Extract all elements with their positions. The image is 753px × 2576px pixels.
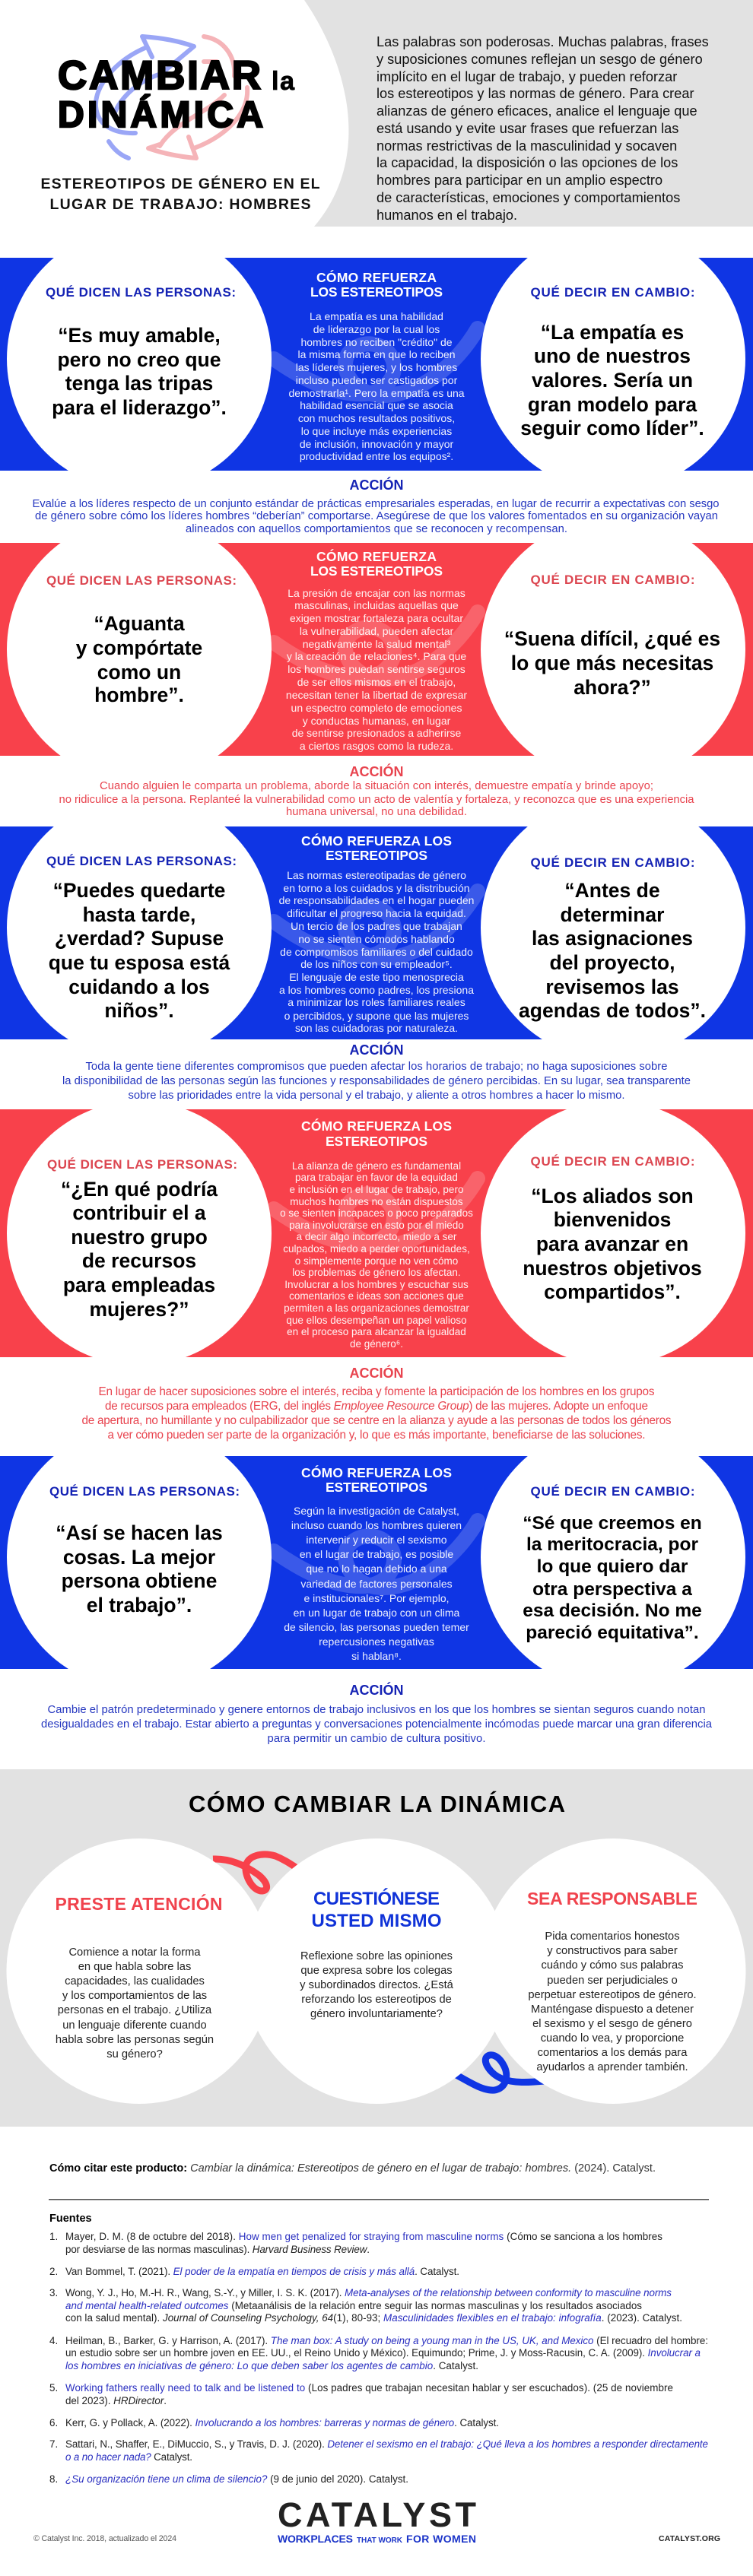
- text: explanation: de los niños con su empleador⁵.: [300, 958, 453, 970]
- source 4: 4.: [49, 2335, 58, 2346]
- text: explanation: Involucrar a los hombres y escuchar sus: [284, 1279, 469, 1290]
- quote: what people say: [56, 1521, 223, 1616]
- quote: what people say: “Puedes quedarte: [53, 879, 225, 902]
- heading: how it reinforces: ESTEREOTIPOS: [326, 1480, 427, 1495]
- action: alineados con aquellos comportamientos que se reconocen y recompensan.: [186, 523, 567, 535]
- heading: question yourself: [312, 1888, 441, 1931]
- quote: what to say instead: esa decisión. No me: [523, 1600, 702, 1621]
- source 3: and mental health-related outcomes (Metaanálisis de la relación entre seguir las normas masculinas y los resultados asociados: [65, 2300, 642, 2311]
- heading: be accountable: SEA RESPONSABLE: [527, 1889, 697, 1908]
- logo: Catalyst: FOR WOMEN: [406, 2533, 476, 2545]
- quote: what to say instead: “Sé que creemos en: [523, 1513, 702, 1534]
- text: explanation: lo que incluye más experiencias: [301, 425, 452, 437]
- header grey background: [304, 0, 753, 227]
- quote: what people say: pero no creo que: [58, 348, 221, 371]
- blue band with circles: [0, 258, 753, 471]
- heading: pay attention: PRESTE ATENCIÓN: [55, 1893, 222, 1914]
- text: explanation: para trabajar en favor de la equidad: [295, 1172, 458, 1183]
- quote: what people say: cuidando a los: [68, 976, 210, 998]
- icon: watermark ribbon: [274, 891, 478, 958]
- source 5: Working fathers really need to talk and be listened to (Los padres que trabajan necesitan hablar y ser escuchados). (25 de noviembre: [65, 2382, 673, 2394]
- text: pay attention: y los comportamientos de las: [62, 1990, 207, 2002]
- quote: what to say instead: determinar: [561, 903, 664, 926]
- text: explanation: necesitan tener la libertad de expresar: [286, 689, 467, 701]
- text: explanation: a minimizar los roles familiares reales: [288, 996, 465, 1008]
- text: explanation: hombres no reciben "crédito" de: [300, 336, 453, 348]
- heading: how it reinforces: [301, 1118, 452, 1149]
- sources heading: Fuentes: [49, 2213, 92, 2225]
- quote: what people say: hombre”.: [94, 684, 184, 706]
- circle: pay attention: [6, 1838, 272, 2104]
- quote: what people say: “Aguanta: [94, 612, 185, 635]
- action: [32, 477, 720, 535]
- heading: question yourself: CUESTIÓNESE: [313, 1888, 440, 1909]
- text: explanation: en torno a los cuidados y la distribución: [283, 882, 470, 894]
- source 3: [49, 2287, 682, 2324]
- text: explanation: demostrarla¹. Pero la empatía es una: [288, 387, 465, 399]
- quote: what to say instead: “Suena difícil, ¿qué es: [504, 627, 720, 650]
- heading: how it reinforces: CÓMO REFUERZA: [316, 269, 437, 285]
- text: pay attention: su género?: [106, 2048, 163, 2060]
- text: be accountable: [528, 1930, 697, 2073]
- panel: stereotype 2: [0, 517, 753, 818]
- heading: how it reinforces: ESTEREOTIPOS: [326, 1134, 427, 1149]
- text: explanation: culpados, miedo a perder oportunidades,: [283, 1243, 470, 1255]
- text: explanation: que ellos desempeñan un papel valioso: [286, 1315, 467, 1326]
- text: explanation: de sentirse presionados a adherirse: [292, 727, 462, 739]
- quote: what to say instead: las asignaciones: [532, 927, 693, 950]
- source 6: Kerr, G. y Pollack, A. (2022). Involucrando a los hombres: barreras y normas de género. Catalyst.: [65, 2417, 499, 2428]
- source 8: 8.: [49, 2473, 58, 2485]
- text: be accountable: Manténgase dispuesto a detener: [531, 2003, 694, 2016]
- source 7: 7.: [49, 2438, 58, 2450]
- quote: what people say: [76, 612, 202, 706]
- intro text: implícito en el lugar de trabajo, y pueden reforzar: [376, 69, 677, 84]
- quote: what people say: [61, 1178, 218, 1321]
- heading: how it reinforces: CÓMO REFUERZA LOS: [301, 1118, 452, 1134]
- red band with circles: [0, 543, 753, 756]
- action: ACCIÓN: [350, 477, 403, 493]
- text: explanation: de silencio, las personas pueden temer: [284, 1621, 469, 1633]
- icon: red squiggle: [213, 1854, 298, 1891]
- quote: what people say: cosas. La mejor: [63, 1546, 215, 1569]
- quote: what to say instead: gran modelo para: [528, 393, 697, 416]
- quote: what to say instead: [520, 321, 704, 439]
- source 4: Heilman, B., Barker, G. y Harrison, A. (2017). The man box: A study on being a young man in the US, UK, and Mexico (El recuadro del hombre:: [65, 2335, 708, 2346]
- panel: stereotype 5: [0, 1425, 753, 1745]
- text: be accountable: comentarios a los demás para: [538, 2047, 688, 2059]
- intro text: humanos en el trabajo.: [376, 208, 517, 223]
- text: pay attention: Comience a notar la forma: [68, 1946, 201, 1959]
- footer: [33, 2495, 720, 2545]
- quote: what to say instead: agendas de todos”.: [519, 999, 706, 1022]
- text: explanation: o simplemente porque no ven cómo: [295, 1255, 458, 1267]
- intro text: normas restrictivas de la masculinidad y socaven: [376, 138, 677, 154]
- heading: how it reinforces: [310, 548, 443, 579]
- action: de recursos para empleados (ERG, del inglés Employee Resource Group) de las mujeres. Adopte un enfoque: [105, 1400, 648, 1413]
- intro text: los estereotipos y las normas de género. Para crear: [376, 86, 694, 101]
- text: explanation: a ciertos rasgos como la rudeza.: [300, 740, 453, 752]
- action: sobre las prioridades entre la vida personal y el trabajo, y aliente a otros hombres a hacer lo mismo.: [128, 1090, 625, 1102]
- text: explanation: Las normas estereotipadas de género: [287, 869, 466, 881]
- label: what people say: QUÉ DICEN LAS PERSONAS:: [49, 1484, 240, 1499]
- text: explanation: e institucionales⁷. Por ejemplo,: [303, 1592, 450, 1604]
- quote: what to say instead: lo que quiero dar: [537, 1556, 688, 1577]
- text: explanation: a los hombres como padres, los presiona: [279, 984, 474, 996]
- source 4: los hombres en iniciativas de género: Lo que deben saber los agentes de cambio. Catalyst.: [65, 2360, 478, 2371]
- heading: how it reinforces: CÓMO REFUERZA: [316, 548, 437, 564]
- quote: what to say instead: “La empatía es: [541, 321, 684, 344]
- heading: how it reinforces: [301, 833, 452, 863]
- text: explanation: La alianza de género es fundamental: [292, 1160, 461, 1172]
- source 4: un estudio sobre ser un hombre joven en EE. UU., el Reino Unido y México). Equimundo; Prime, J. y Moss-Racusin, C. A. (2009). Involucrar a: [65, 2347, 701, 2359]
- text: explanation: con muchos resultados positivos,: [298, 412, 455, 424]
- text: be accountable: pueden ser perjudiciales o: [547, 1975, 678, 1987]
- red band with circles: [0, 1101, 753, 1366]
- text: explanation: de compromisos familiares o del cuidado: [280, 946, 473, 958]
- text: explanation: muchos hombres no están dispuestos: [290, 1196, 463, 1207]
- quote: what people say: de recursos: [82, 1249, 196, 1272]
- text: explanation: de liderazgo por la cual los: [313, 323, 440, 335]
- text: pay attention: [56, 1946, 214, 2060]
- label: what to say instead: QUÉ DECIR EN CAMBIO:: [531, 855, 695, 870]
- text: explanation: incluso cuando los hombres quieren: [291, 1519, 462, 1531]
- quote: what people say: para el liderazgo”.: [52, 396, 227, 419]
- heading: how it reinforces: [301, 1464, 452, 1495]
- action: de género sobre cómo los líderes hombres “deberían” comportarse. Asegúrese de que los valores fomentados en su organización vayan: [35, 510, 718, 522]
- text: question yourself: y subordinados directos. ¿Está: [300, 1979, 454, 1991]
- text: question yourself: Reflexione sobre las opiniones: [300, 1950, 453, 1962]
- label: what people say: QUÉ DICEN LAS PERSONAS:: [47, 1157, 237, 1172]
- intro text: de características, emociones y comportamientos: [376, 190, 680, 205]
- source 2: Van Bommel, T. (2021). El poder de la empatía en tiempos de crisis y más allá. Catalyst.: [65, 2266, 459, 2277]
- text: explanation: la vulnerabilidad, pueden afectar: [300, 625, 454, 637]
- quote: what people say: [52, 324, 227, 419]
- source 1: Mayer, D. M. (8 de octubre del 2018). How men get penalized for straying from masculine norms (Cómo se sanciona a los hombres: [65, 2231, 662, 2242]
- action: no ridiculice a la persona. Replanteé la vulnerabilidad como un acto de valentía y fortaleza, y reconozca que es una experiencia: [59, 794, 694, 806]
- action: Evalúe a los líderes respecto de un conjunto estándar de prácticas empresariales esperadas, en lugar de recurrir a expectativas con sesgo: [32, 498, 720, 510]
- label: what people say: QUÉ DICEN LAS PERSONAS:: [46, 285, 236, 300]
- quote: what people say: “Es muy amable,: [58, 324, 221, 347]
- title: CAMBIAR: [58, 53, 261, 98]
- panel: stereotype 4: [0, 1101, 753, 1442]
- action: ACCIÓN: [350, 1365, 403, 1381]
- intro text: [376, 34, 709, 223]
- text: explanation: exigen mostrar fortaleza para ocultar: [290, 612, 463, 624]
- quote: what people say: [49, 879, 230, 1022]
- source 7: Sattari, N., Shaffer, E., DiMuccio, S., y Travis, D. J. (2020). Detener el sexismo en el trabajo: ¿Qué lleva a los hombres a responder directamente: [65, 2438, 708, 2450]
- source 5: [49, 2382, 673, 2406]
- text: explanation: [279, 869, 474, 1034]
- title: [58, 53, 295, 135]
- text: explanation: a decir algo incorrecto, miedo a ser: [297, 1231, 457, 1242]
- heading: CÓMO CAMBIAR LA DINÁMICA: [189, 1790, 565, 1817]
- quote: what to say instead: [504, 627, 720, 699]
- quote: what to say instead: nuestros objetivos: [523, 1257, 702, 1280]
- action: de apertura, no humillante y no culpabilizador que se centre en la alianza y ayude a las personas de todos los géneros: [82, 1414, 672, 1427]
- heading: how it reinforces: LOS ESTEREOTIPOS: [310, 284, 443, 300]
- text: explanation: los problemas de género los afectan.: [292, 1267, 461, 1278]
- text: explanation: son las cuidadoras por naturaleza.: [295, 1022, 458, 1034]
- label: what to say instead: QUÉ DECIR EN CAMBIO:: [531, 573, 695, 587]
- text: explanation: El lenguaje de este tipo menosprecia: [289, 971, 464, 983]
- source 5: 5.: [49, 2382, 58, 2394]
- text: explanation: intervenir y reducir el sexismo: [306, 1534, 447, 1546]
- logo: Catalyst: THAT WORK: [357, 2536, 403, 2545]
- label: what people say: QUÉ DICEN LAS PERSONAS:: [46, 854, 237, 868]
- source 2: 2.: [49, 2266, 58, 2277]
- text: explanation: un espectro completo de emociones: [291, 702, 462, 714]
- text: explanation: e inclusión en el lugar de trabajo, pero: [290, 1184, 463, 1195]
- icon: circular arrows behind title: [96, 36, 247, 158]
- text: explanation: de inclusión, innovación y mayor: [300, 438, 453, 450]
- heading: question yourself: USTED MISMO: [312, 1911, 441, 1931]
- text: explanation: la misma forma en que lo reciben: [298, 348, 455, 360]
- text: explanation: o percibidos, y supone que las mujeres: [284, 1010, 469, 1022]
- text: question yourself: reforzando los estereotipos de: [301, 1994, 452, 2006]
- source 1: [49, 2231, 662, 2255]
- source 1: por desviarse de las normas masculinas). Harvard Business Review.: [65, 2244, 370, 2255]
- source 8: ¿Su organización tiene un clima de silencio? (9 de junio del 2020). Catalyst.: [65, 2473, 408, 2485]
- text: explanation: no se sienten cómodos hablando: [298, 933, 455, 945]
- text: explanation: [286, 587, 467, 752]
- intro text: está usando y evite usar frases que refuerzan las: [376, 121, 678, 136]
- quote: what to say instead: “Antes de: [564, 879, 660, 902]
- quote: what people say: como un: [97, 661, 181, 684]
- panel: stereotype 1: [0, 258, 753, 535]
- action: la disponibilidad de las personas según las funciones y responsabilidades de género percibidas. En su lugar, sea transparente: [62, 1075, 691, 1087]
- quote: what people say: el trabajo”.: [87, 1594, 192, 1616]
- source 5: del 2023). HRDirector.: [65, 2395, 167, 2406]
- text: explanation: en un lugar de trabajo con un clima: [294, 1607, 460, 1619]
- text: be accountable: Pida comentarios honestos: [545, 1930, 680, 1943]
- text: explanation: y conductas humanas, en lugar: [303, 715, 451, 727]
- quote: what to say instead: [523, 1513, 702, 1643]
- text: explanation: productividad entre los equipos².: [300, 450, 453, 462]
- action: ACCIÓN: [350, 1042, 403, 1058]
- quote: what to say instead: ahora?”: [573, 676, 651, 699]
- heading: how it reinforces: [310, 269, 443, 300]
- quote: what people say: nuestro grupo: [71, 1226, 208, 1248]
- source 1: 1.: [49, 2231, 58, 2242]
- quote: what to say instead: la meritocracia, por: [526, 1534, 698, 1555]
- action: Cambie el patrón predeterminado y genere entornos de trabajo inclusivos en los que los hombres se sientan seguros cuando notan: [47, 1704, 706, 1716]
- text: be accountable: ayudarlos a aprender también.: [536, 2061, 688, 2073]
- icon: watermark ribbon: [274, 1521, 478, 1588]
- action: a ver cómo pueden ser parte de la organización y, lo que es más importante, beneficiarse de las soluciones.: [108, 1429, 645, 1442]
- text: explanation: comentarios e ideas son acciones que: [289, 1290, 464, 1302]
- quote: what people say: mujeres?”: [89, 1298, 189, 1321]
- quote: what people say: y compórtate: [76, 636, 202, 659]
- quote: what people say: hasta tarde,: [83, 903, 195, 926]
- quote: what to say instead: seguir como líder”.: [520, 417, 704, 439]
- icon: watermark ribbon: [274, 1179, 478, 1245]
- intro text: y suposiciones comunes reflejan un sesgo de género: [376, 52, 703, 67]
- source 7: [49, 2438, 708, 2463]
- label: what to say instead: QUÉ DECIR EN CAMBIO:: [531, 1484, 695, 1499]
- circle: question yourself: [243, 1838, 510, 2104]
- quote: what people say: niños”.: [104, 999, 174, 1022]
- action: ACCIÓN: [350, 763, 403, 779]
- intro text: hombres para participar en un amplio espectro: [376, 173, 662, 188]
- text: explanation: negativamente la salud mental³: [303, 638, 451, 650]
- text: explanation: La presión de encajar con las normas: [288, 587, 465, 599]
- action: ACCIÓN: [350, 1682, 403, 1698]
- text: explanation: si hablan⁸.: [351, 1650, 402, 1662]
- source 3: 3.: [49, 2287, 58, 2298]
- circle: be accountable: [481, 1838, 745, 2104]
- text: explanation: en el proceso para alcanzar la igualdad: [287, 1326, 466, 1337]
- quote: what to say instead: otra perspectiva a: [532, 1579, 692, 1600]
- action: [41, 1682, 713, 1745]
- action: Toda la gente tiene diferentes compromisos que pueden afectar los horarios de trabajo; no haga suposiciones sobre: [85, 1061, 668, 1073]
- section background: [0, 1769, 753, 2127]
- panel: header: [41, 0, 753, 227]
- action: Cuando alguien le comparta un problema, aborde la situación con interés, demuestre empatía y brinde apoyo;: [100, 780, 653, 792]
- heading: how it reinforces: LOS ESTEREOTIPOS: [310, 563, 443, 579]
- text: explanation: de responsabilidades en el hogar pueden: [279, 894, 474, 906]
- text: explanation: que no lo hagan debido a una: [306, 1562, 447, 1575]
- heading: how it reinforces: ESTEREOTIPOS: [326, 848, 427, 863]
- text: explanation: de género⁶.: [350, 1338, 403, 1350]
- text: pay attention: en que habla sobre las: [78, 1961, 191, 1973]
- text: explanation: variedad de factores personales: [300, 1578, 453, 1590]
- text: explanation: dificultar el progreso hacia la equidad.: [287, 907, 466, 919]
- panel: stereotype 3: [0, 826, 753, 1101]
- citation: Cómo citar este producto: Cambiar la dinámica: Estereotipos de género en el lugar de trabajo: hombres. (2024). Catalyst.: [49, 2162, 656, 2175]
- label: what to say instead: QUÉ DECIR EN CAMBIO:: [531, 285, 695, 300]
- quote: what to say instead: revisemos las: [545, 976, 679, 998]
- text: explanation: y la creación de relaciones⁴. Para que: [287, 650, 466, 662]
- text: explanation: las líderes mujeres, y los hombres: [296, 361, 457, 373]
- text: be accountable: perpetuar estereotipos de género.: [528, 1989, 697, 2001]
- text: explanation: permiten a las organizaciones demostrar: [284, 1302, 469, 1314]
- blue band with circles: [0, 826, 753, 1039]
- action: [62, 1042, 691, 1102]
- heading: how it reinforces: CÓMO REFUERZA LOS: [301, 833, 452, 849]
- title: DINÁMICA: [58, 94, 263, 135]
- action: [59, 763, 694, 818]
- quote: what people say: “Así se hacen las: [56, 1521, 223, 1544]
- quote: what to say instead: uno de nuestros: [534, 344, 691, 367]
- blue band with circles: [0, 1456, 753, 1669]
- text: question yourself: que expresa sobre los colegas: [300, 1965, 453, 1977]
- source 7: o a no hacer nada? Catalyst.: [65, 2451, 192, 2463]
- quote: what people say: para empleadas: [63, 1274, 215, 1296]
- text: question yourself: género involuntariamente?: [310, 2008, 443, 2020]
- quote: what to say instead: compartidos”.: [544, 1280, 681, 1303]
- logo: Catalyst: WORKPLACES: [278, 2533, 353, 2545]
- intro text: la capacidad, la disposición o las opciones de los: [376, 155, 678, 170]
- quote: what to say instead: para avanzar en: [536, 1232, 688, 1255]
- title: la: [272, 67, 295, 96]
- text: explanation: o se sienten incapaces o poco preparados: [280, 1207, 473, 1219]
- text: explanation: [284, 1505, 469, 1662]
- text: explanation: masculinas, incluidas aquellas que: [294, 599, 459, 611]
- quote: what to say instead: pareció equitativa”.: [526, 1623, 699, 1643]
- action: [82, 1365, 672, 1442]
- text: explanation: repercusiones negativas: [319, 1635, 434, 1648]
- text: explanation: [280, 1160, 473, 1350]
- icon: watermark ribbon: [274, 612, 478, 679]
- quote: what people say: ¿verdad? Supuse: [55, 927, 224, 950]
- label: what to say instead: QUÉ DECIR EN CAMBIO:: [531, 1154, 695, 1169]
- sources: [49, 2213, 708, 2485]
- icon: blue squiggle: [456, 2055, 545, 2090]
- text: be accountable: cuando lo vea, y proporcione: [541, 2032, 684, 2045]
- source 3: con la salud mental). Journal of Counseling Psychology, 64(1), 80-93; Masculinidades flexibles en el trabajo: infografía. (2023). Catalyst.: [65, 2312, 682, 2324]
- subtitle: ESTEREOTIPOS DE GÉNERO EN EL: [41, 175, 320, 192]
- action: En lugar de hacer suposiciones sobre el interés, reciba y fomente la participación de los hombres en los grupos: [99, 1385, 655, 1398]
- quote: what people say: tenga las tripas: [65, 372, 213, 395]
- action: desigualdades en el trabajo. Estar abierto a preguntas y conversaciones potencialmente incómodas puede marcar una gran diferencia: [41, 1718, 713, 1731]
- quote: what to say instead: del proyecto,: [550, 951, 675, 974]
- source 6: 6.: [49, 2417, 58, 2428]
- text: pay attention: habla sobre las personas según: [56, 2034, 214, 2046]
- text: explanation: habilidad esencial que se asocia: [300, 399, 453, 411]
- quote: what people say: “¿En qué podría: [61, 1178, 218, 1201]
- action: para permitir un cambio de cultura positivo.: [268, 1733, 485, 1745]
- quote: what to say instead: lo que más necesitas: [511, 652, 713, 674]
- text: explanation: La empatía es una habilidad: [310, 310, 443, 322]
- text: explanation: Un tercio de los padres que trabajan: [291, 920, 462, 932]
- text: question yourself: [300, 1950, 454, 2020]
- text: explanation: en el lugar de trabajo, es posible: [300, 1548, 453, 1560]
- text: pay attention: un lenguaje diferente cuando: [62, 2019, 207, 2032]
- text: be accountable: el sexismo y el sesgo de género: [532, 2018, 692, 2030]
- action: humana universal, no una debilidad.: [286, 806, 467, 818]
- text: explanation: incluso pueden ser castigados por: [296, 374, 458, 386]
- subtitle: LUGAR DE TRABAJO: HOMBRES: [50, 196, 310, 213]
- source 4: [49, 2335, 708, 2371]
- subtitle: [41, 175, 320, 213]
- source 3: Wong, Y. J., Ho, M.-H. R., Wang, S.-Y., y Miller, I. S. K. (2017). Meta-analyses of the relationship between conformity to masculine norms: [65, 2287, 672, 2298]
- text: be accountable: cuándo y cómo sus palabras: [542, 1959, 683, 1972]
- text: pay attention: capacidades, las cualidades: [65, 1975, 205, 1988]
- text: explanation: Según la investigación de Catalyst,: [294, 1505, 459, 1517]
- text: pay attention: personas en el trabajo. ¿Utiliza: [58, 2004, 212, 2016]
- quote: what to say instead: “Los aliados son: [531, 1185, 694, 1207]
- heading: how it reinforces: CÓMO REFUERZA LOS: [301, 1464, 452, 1480]
- website: CATALYST.ORG: [659, 2534, 720, 2543]
- intro text: alianzas de género eficaces, analice el lenguaje que: [376, 103, 697, 119]
- quote: what to say instead: valores. Sería un: [532, 369, 693, 392]
- text: explanation: para involucrarse en esto por el miedo: [289, 1220, 464, 1231]
- quote: what to say instead: [523, 1185, 702, 1303]
- quote: what to say instead: [519, 879, 706, 1022]
- quote: what people say: que tu esposa está: [49, 951, 230, 974]
- quote: what to say instead: bienvenidos: [554, 1208, 671, 1231]
- intro text: Las palabras son poderosas. Muchas palabras, frases: [376, 34, 709, 49]
- text: explanation: los hombres puedan sentirse seguros: [288, 663, 465, 675]
- label: what people say: QUÉ DICEN LAS PERSONAS:: [46, 573, 237, 588]
- text: explanation: de ser ellos mismos en el trabajo,: [297, 676, 456, 688]
- quote: what people say: persona obtiene: [62, 1569, 217, 1592]
- copyright: © Catalyst Inc. 2018, actualizado el 2024: [33, 2534, 176, 2543]
- text: be accountable: y constructivos para saber: [547, 1945, 678, 1957]
- panel: how to change the dynamic: [0, 1769, 753, 2127]
- icon: watermark ribbon: [274, 328, 478, 395]
- quote: what people say: contribuir el a: [72, 1201, 206, 1224]
- logo: Catalyst: CATALYST: [278, 2495, 476, 2534]
- text: explanation: [288, 310, 465, 462]
